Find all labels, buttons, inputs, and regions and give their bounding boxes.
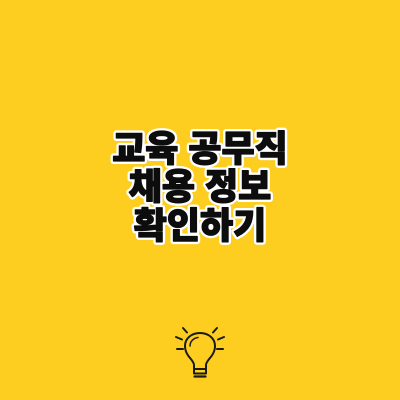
title: 교육 공무직 (112, 128, 288, 169)
title: 채용 정보 (129, 166, 271, 207)
title: 확인하기 (134, 205, 266, 246)
title: 교육 공무직 (112, 128, 288, 169)
title: 채용 정보 (129, 166, 271, 207)
title: 확인하기 (134, 205, 266, 246)
icon: light bulb (175, 327, 225, 378)
